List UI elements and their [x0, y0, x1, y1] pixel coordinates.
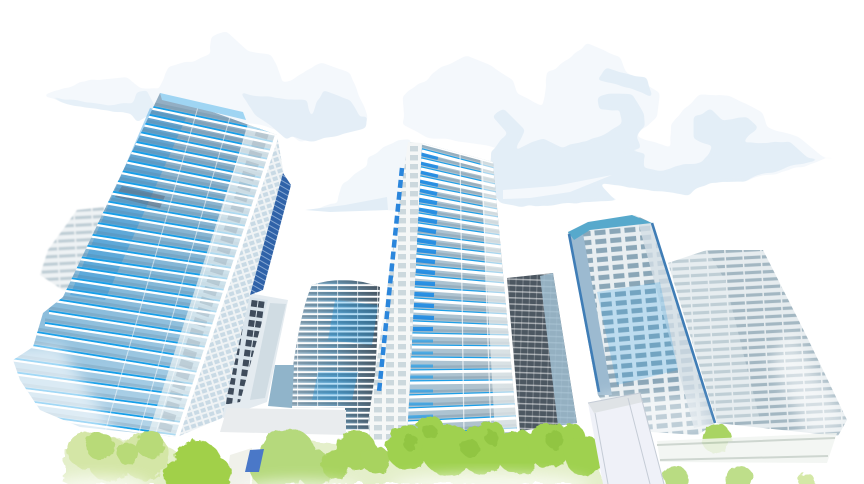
building: slotted mid tower	[212, 293, 288, 418]
trees: pale left clump	[67, 432, 169, 482]
centre tower front face	[407, 143, 517, 440]
centre tower blue side slats	[379, 168, 402, 392]
main tower front face	[13, 93, 277, 437]
tree: mid group	[251, 428, 332, 484]
walkway: elevated bridge	[657, 433, 837, 463]
tree: behind bridge	[701, 423, 731, 453]
pale tower fade	[770, 330, 850, 440]
clouds	[43, 32, 860, 212]
main tower blue spine	[250, 173, 291, 295]
trees: pale under layer	[65, 435, 602, 484]
building: pale right tower	[668, 250, 850, 440]
right tower cyan panes	[597, 282, 678, 385]
building: round tower	[288, 280, 380, 430]
cloud: streak highlight	[503, 175, 612, 199]
building: main left tower	[0, 93, 291, 445]
structure: foreground white tower box	[588, 393, 664, 484]
main tower side face	[177, 135, 284, 437]
building: right tower with blue edges	[568, 215, 715, 440]
main tower corner edge	[177, 135, 277, 437]
tree: under bridge left	[664, 466, 688, 484]
building: dark tower	[507, 273, 577, 431]
tree: bright left	[164, 441, 232, 484]
cloud: left, shaded layer west	[43, 90, 157, 122]
main tower rooftop	[160, 93, 246, 120]
round tower blue panes	[312, 300, 378, 400]
trees: mid left	[86, 430, 164, 465]
centre tower floors	[407, 138, 517, 436]
centre tower blue bay	[413, 154, 438, 329]
trees: white wash at base	[50, 474, 590, 484]
pale tower front shade	[668, 250, 760, 423]
centre tower lower blue bay	[408, 341, 433, 417]
cloud: right, light layer	[403, 43, 860, 182]
main tower grey patch	[115, 186, 165, 208]
cloud: left, shaded layer east	[240, 90, 368, 142]
main tower bottom left fade	[0, 345, 120, 445]
cloud: right, shaded layer	[490, 92, 823, 207]
centre tower side face	[368, 142, 422, 440]
tree: under bridge right	[726, 466, 754, 484]
right tower lower fade	[600, 395, 710, 440]
building: small blue block	[268, 365, 294, 408]
cloud: centre left, shaded	[305, 197, 388, 212]
main tower balcony floors	[0, 99, 277, 437]
tree: mid right group	[321, 430, 390, 479]
main tower strong blue left bay	[70, 108, 186, 300]
right tower rooftop	[568, 215, 652, 240]
cloud: centre left, light	[305, 140, 412, 210]
trees: foreground greenery	[65, 415, 815, 484]
cloud: right, upper shaded puff	[597, 68, 652, 97]
building: centre tower	[368, 138, 517, 440]
sign: blue banner	[245, 449, 264, 472]
building: low white hall	[220, 408, 346, 435]
right tower left column	[568, 228, 612, 395]
ground: pale path	[226, 448, 252, 484]
building: far left pale tower	[40, 207, 108, 290]
right tower side strip	[637, 218, 715, 428]
cloud: left, light layer	[43, 32, 368, 142]
dark tower light strip	[540, 273, 577, 426]
tree: centre bright canopy	[386, 415, 605, 476]
right tower edge lines	[569, 223, 715, 423]
tree: centre darker leaves	[402, 425, 564, 457]
tree: small far right	[797, 473, 815, 484]
